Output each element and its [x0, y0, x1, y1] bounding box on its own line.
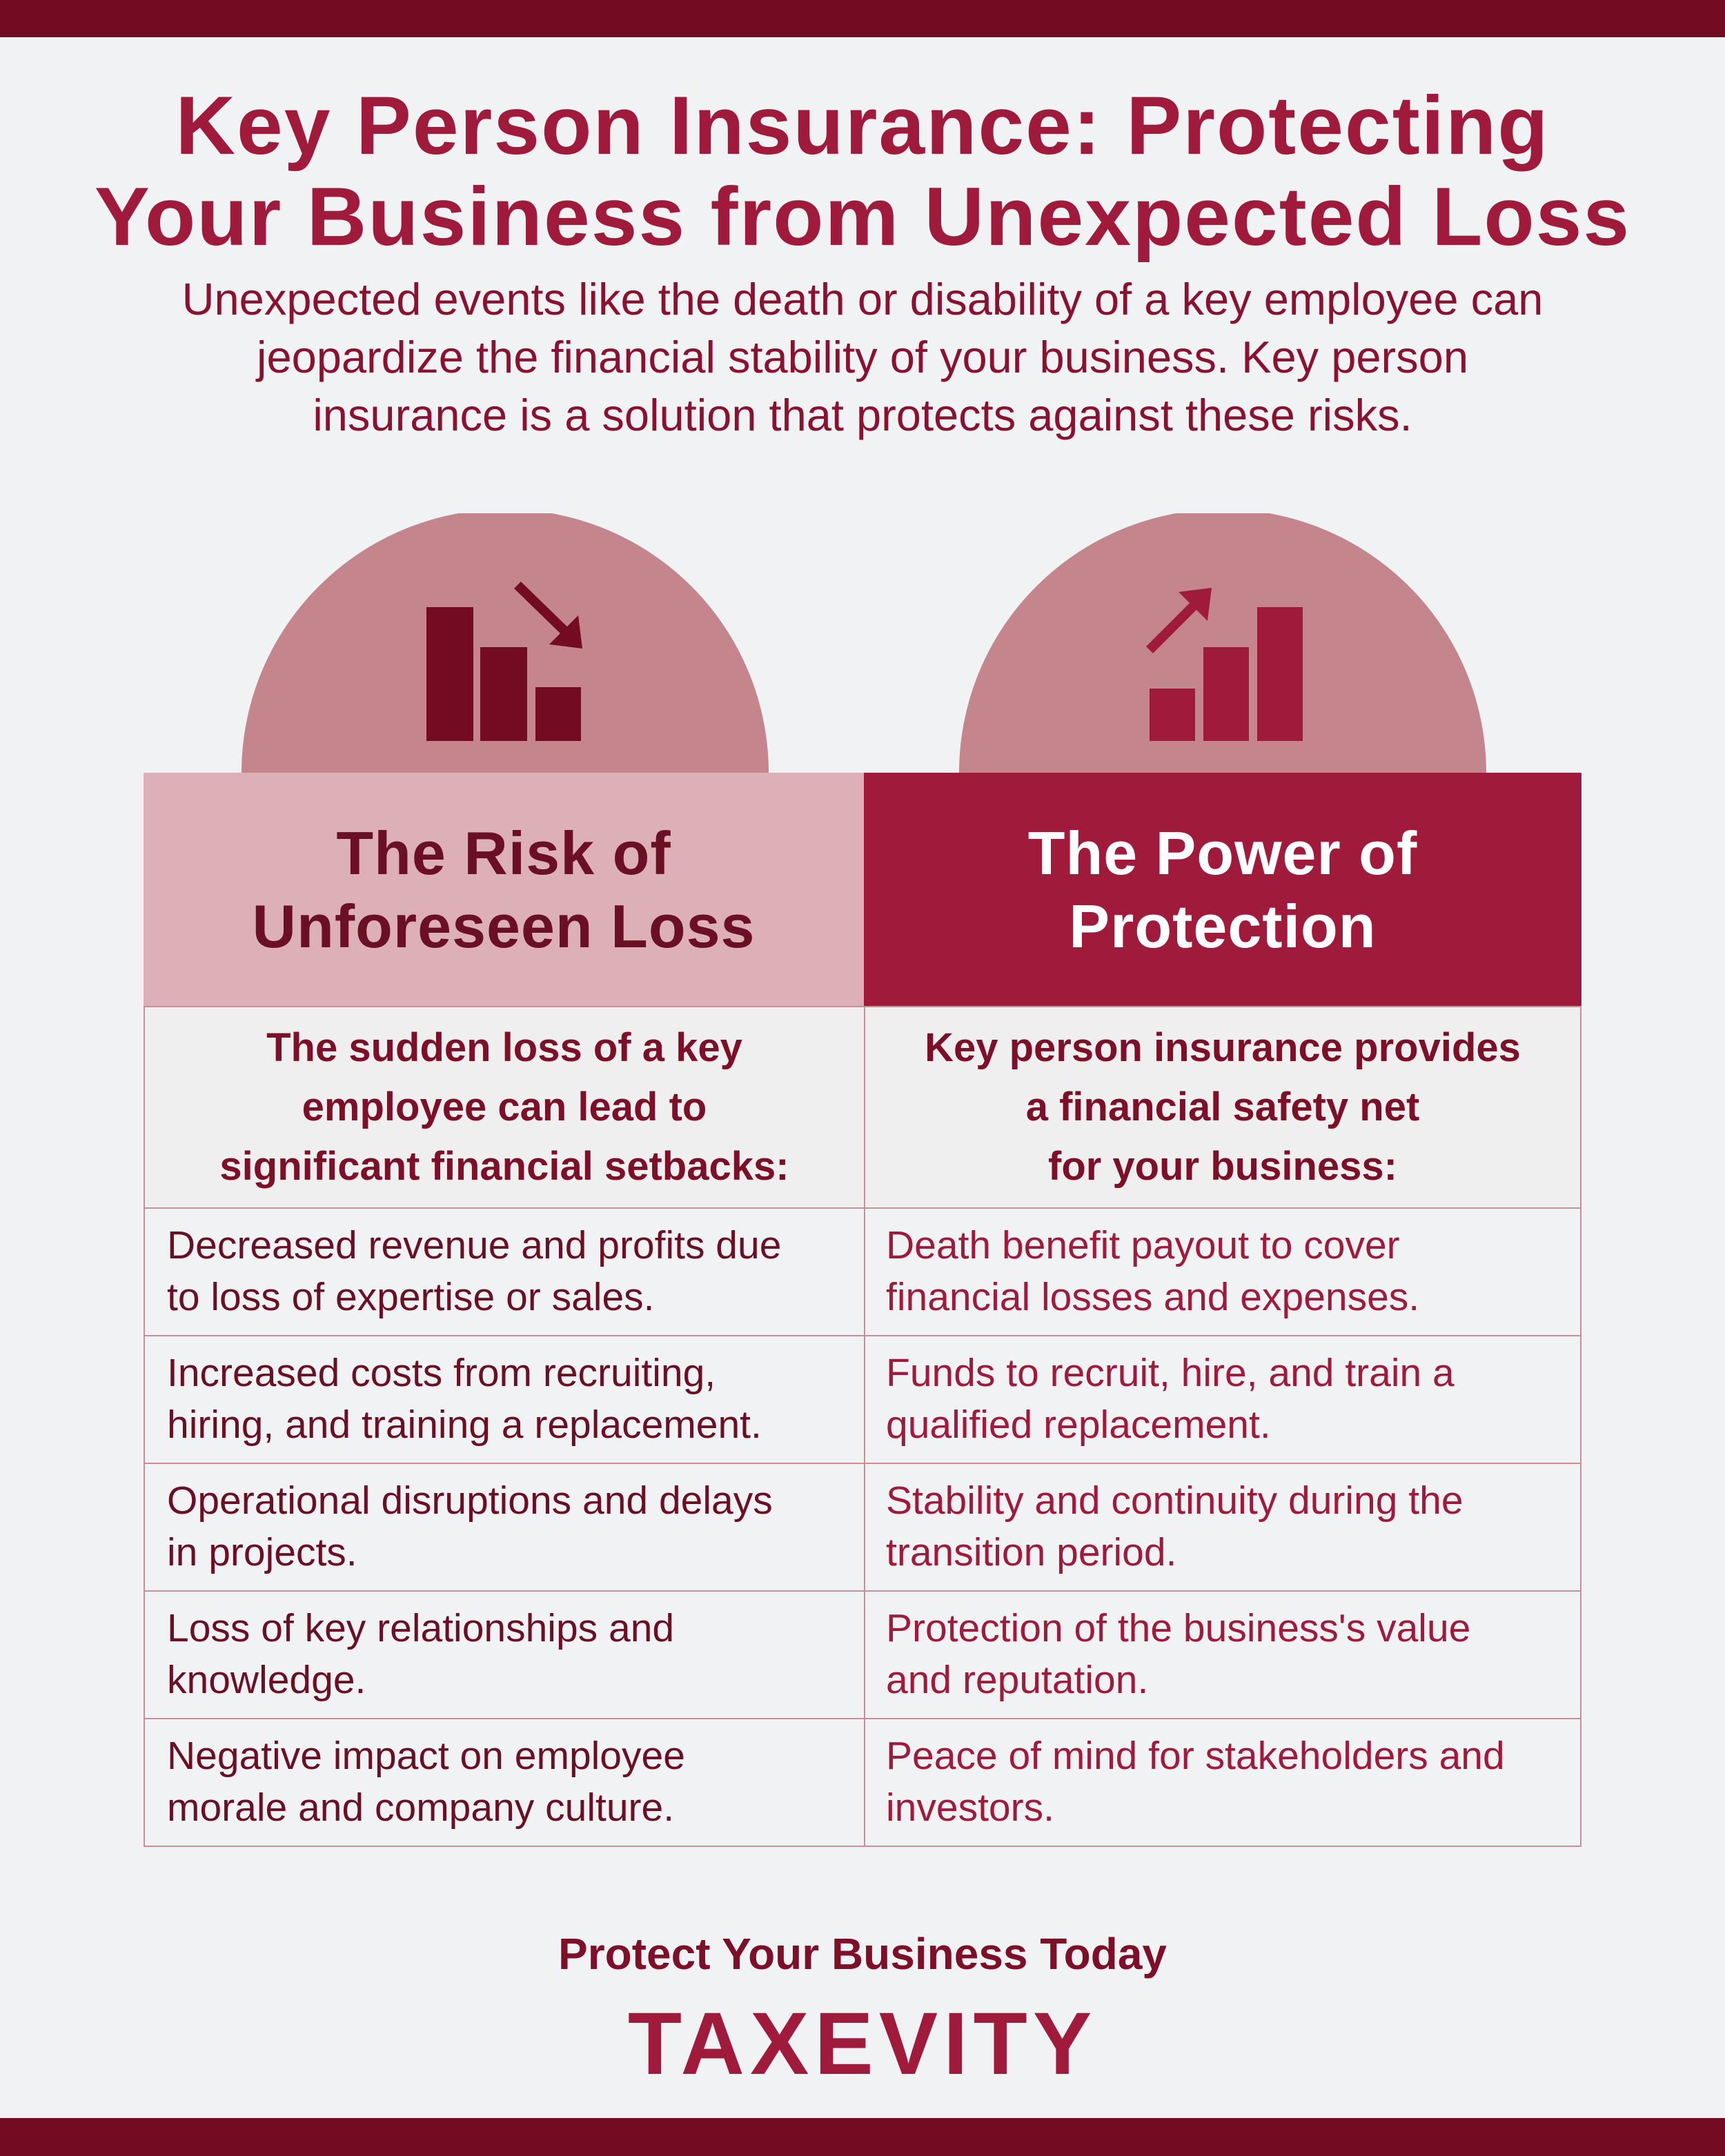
subtitle: Unexpected events like the death or disability of a key employee can	[182, 274, 1543, 324]
subtitle: insurance is a solution that protects against these risks.	[313, 390, 1412, 440]
panel header: protection: Protection	[1069, 892, 1377, 960]
title: Your Business from Unexpected Loss	[95, 170, 1630, 263]
panel header: risk	[144, 773, 864, 1007]
protection list: financial losses and expenses.	[886, 1275, 1419, 1319]
protection list: Stability and continuity during the	[886, 1478, 1463, 1523]
protection list: qualified replacement.	[886, 1403, 1271, 1447]
risk list: knowledge.	[167, 1658, 366, 1702]
intro: risk: The sudden loss of a key	[266, 1025, 742, 1070]
call to action: Protect Your Business Today	[558, 1929, 1167, 1979]
top bar	[0, 0, 1725, 37]
title: Key Person Insurance: Protecting	[175, 79, 1550, 172]
subtitle: jeopardize the financial stability of your business. Key person	[257, 332, 1468, 382]
protection list: Death benefit payout to cover	[886, 1223, 1400, 1267]
bottom bar	[0, 2118, 1725, 2156]
intro: protection: a financial safety net	[1026, 1085, 1419, 1129]
panel header: protection	[864, 773, 1581, 1007]
icon: declining chart semicircle	[241, 513, 769, 773]
protection list: Funds to recruit, hire, and train a	[886, 1351, 1455, 1395]
panel header: risk: The Risk of	[336, 819, 671, 887]
intro: risk: significant financial setbacks:	[219, 1144, 789, 1189]
protection list: Protection of the business's value	[886, 1606, 1470, 1650]
intro: protection: for your business:	[1048, 1144, 1397, 1189]
protection list: and reputation.	[886, 1658, 1148, 1702]
protection list: Peace of mind for stakeholders and	[886, 1734, 1505, 1778]
subtitle	[182, 274, 1543, 440]
protection list	[865, 1209, 1581, 1847]
intro: protection: Key person insurance provides	[925, 1025, 1521, 1070]
intro: risk	[144, 1006, 865, 1209]
title	[95, 79, 1630, 263]
risk list: Loss of key relationships and	[167, 1606, 674, 1650]
risk list	[144, 1209, 865, 1847]
panel header: risk: Unforeseen Loss	[253, 892, 755, 960]
risk list: Negative impact on employee	[167, 1734, 685, 1778]
risk list: morale and company culture.	[167, 1786, 674, 1830]
risk list: Increased costs from recruiting,	[167, 1351, 716, 1395]
logo: TAXEVITY	[628, 1995, 1097, 2093]
intro: risk: employee can lead to	[302, 1085, 707, 1129]
risk list: Operational disruptions and delays	[167, 1478, 773, 1523]
protection list: investors.	[886, 1786, 1054, 1830]
panel header: protection: The Power of	[1028, 819, 1417, 887]
risk list: hiring, and training a replacement.	[167, 1403, 762, 1447]
risk list: to loss of expertise or sales.	[167, 1275, 654, 1319]
risk list: in projects.	[167, 1530, 357, 1574]
intro: protection	[864, 1006, 1581, 1209]
protection list: transition period.	[886, 1530, 1176, 1574]
risk list: Decreased revenue and profits due	[167, 1223, 781, 1267]
icon: rising chart semicircle	[959, 513, 1486, 773]
